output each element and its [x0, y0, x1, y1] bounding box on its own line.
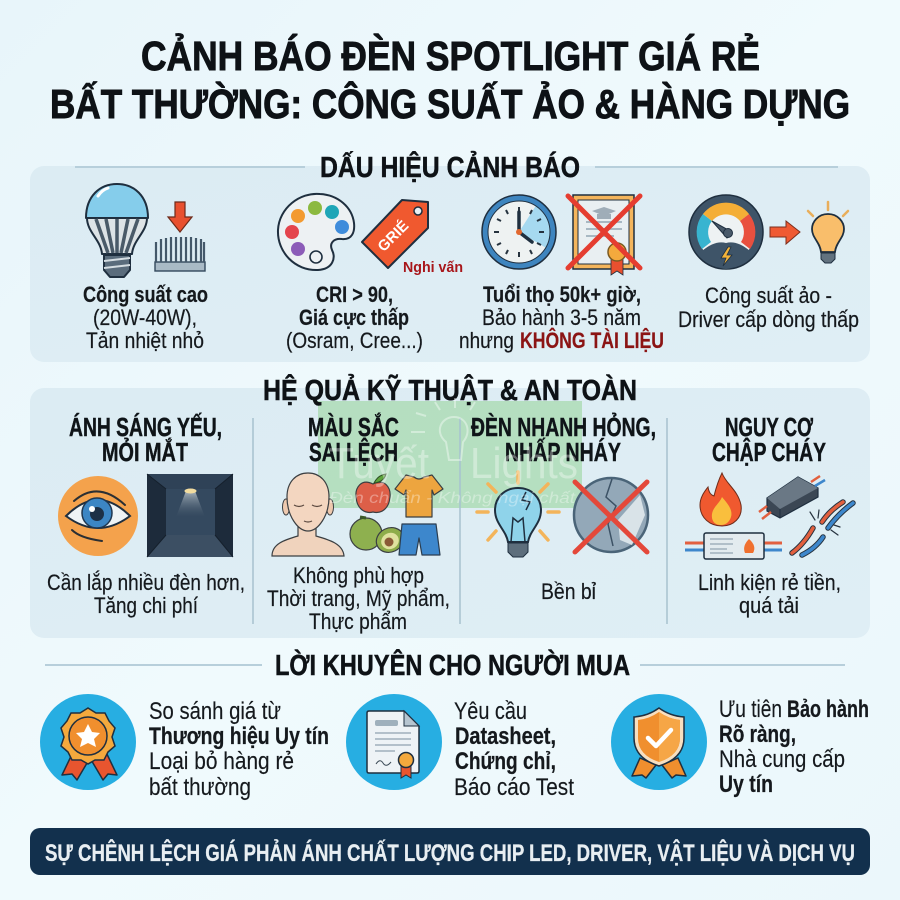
text: compare prices: So sánh giá từ [149, 698, 281, 725]
watermark: Tuyết [329, 439, 429, 488]
text: fire risk [698, 412, 841, 618]
text: colour deviation [267, 412, 450, 634]
text: fire risk: CHẬP CHÁY [712, 437, 826, 467]
text: fire risk: NGUY CƠ [725, 412, 814, 442]
text: CRI [286, 282, 423, 353]
icon: tired eye [58, 476, 138, 556]
icon: dark room [147, 474, 233, 557]
text: low light: ÁNH SÁNG YẾU, [69, 412, 222, 442]
text: fake wattage: Công suất ảo - [705, 283, 832, 308]
text: compare prices: Loại bỏ hàng rẻ [149, 748, 294, 775]
heading: warning signs: DẤU HIỆU CẢNH BÁO [320, 150, 580, 184]
text: prefer warranty: Uy tín [719, 771, 773, 798]
icon: award badge [40, 694, 136, 790]
text: compare prices [149, 698, 329, 801]
text: low light: Cần lắp nhiều đèn hơn, [47, 570, 245, 595]
text: fake wattage [678, 283, 859, 332]
text: fast failure: ĐÈN NHANH HỎNG, [471, 411, 656, 442]
icon: crossed-out broken globe [574, 478, 648, 552]
icon: small heat sink with arrow [155, 202, 205, 271]
text: prefer warranty: Ưu tiên [719, 696, 782, 723]
icon: fruit and clothes [350, 474, 443, 557]
watermark: Lights [470, 439, 578, 488]
text: colour deviation: MÀU SẮC [308, 412, 399, 442]
text: fake wattage: Driver cấp dòng thấp [678, 307, 859, 332]
icon: cracked bulb [477, 472, 559, 557]
text: low light: Tăng chi phí [94, 593, 198, 618]
icon: price tag: GRIÉ [374, 217, 412, 255]
text: fast failure [471, 411, 656, 604]
text: colour deviation: SAI LỆCH [309, 437, 398, 467]
text: lifetime and warranty [459, 282, 664, 353]
panel: warning signs [30, 150, 870, 362]
text: high power: Tản nhiệt nhỏ [86, 328, 204, 353]
text: request documents: Yêu cầu [454, 698, 527, 725]
icon: clock [482, 195, 556, 269]
icon: datasheet document [346, 694, 442, 790]
icon: overheating component [685, 533, 782, 559]
icon: gauge [689, 195, 763, 269]
text: request documents: Chứng chỉ, [455, 748, 556, 775]
text: prefer warranty: Rõ ràng, [719, 721, 796, 748]
text: low light: MỎI MẮT [102, 436, 188, 467]
icon: crossed-out certificate [568, 195, 640, 275]
arrow [770, 221, 800, 244]
icon: price tag [362, 200, 428, 268]
icon: warranty shield [611, 694, 707, 790]
heading: consequences: HỆ QUẢ KỸ THUẬT & AN TOÀN [263, 373, 637, 407]
title [50, 33, 850, 127]
text: lifetime and warranty: KHÔNG TÀI LIỆU [520, 328, 664, 353]
icon: broken wires [792, 502, 853, 555]
icon: driver box [759, 476, 825, 519]
text: lifetime and warranty: Bảo hành 3-5 năm [482, 305, 641, 330]
watermark [329, 398, 578, 507]
text: fire risk: Linh kiện rẻ tiền, [698, 570, 841, 595]
text: lifetime and warranty: Tuổi thọ 50k+ giờ, [483, 282, 641, 307]
text: high power [83, 282, 208, 353]
text: low light [47, 412, 245, 618]
text: compare prices: Thương hiệu Uy tín [149, 723, 329, 750]
text: compare prices: bất thường [149, 774, 251, 801]
text: lifetime and warranty: nhưng [459, 328, 514, 353]
label: questionable: Nghi vấn [403, 259, 463, 276]
bottom banner [30, 828, 870, 875]
text: prefer warranty: Bảo hành [787, 696, 869, 723]
icon: dim bulb [808, 202, 848, 263]
text: colour deviation: Thời trang, Mỹ phẩm, [267, 586, 450, 611]
text: fire risk: quá tải [739, 593, 799, 618]
icon: flame [700, 473, 741, 526]
text: colour deviation: Không phù hợp [293, 563, 424, 588]
icon: colour palette [278, 194, 354, 270]
title: CẢNH BÁO ĐÈN SPOTLIGHT GIÁ RẺ [141, 33, 760, 79]
text: fast failure: NHẤP NHÁY [505, 437, 621, 467]
text: request documents: Datasheet, [455, 723, 556, 750]
text: high power: (20W-40W), [93, 305, 197, 330]
text: CRI: CRI > 90, [316, 282, 393, 307]
text: CRI: (Osram, Cree...) [286, 328, 423, 353]
text: request documents [454, 698, 574, 801]
text: high power: Công suất cao [83, 282, 208, 307]
text: CRI: Giá cực thấp [299, 305, 409, 330]
text: request documents: Báo cáo Test [454, 774, 574, 801]
section: buyer advice [40, 648, 869, 801]
text: prefer warranty: Nhà cung cấp [719, 746, 845, 773]
text: prefer warranty [719, 696, 869, 798]
heading: buyer advice: LỜI KHUYÊN CHO NGƯỜI MUA [275, 648, 630, 682]
text: colour deviation: Thực phẩm [309, 609, 407, 634]
panel: consequences [30, 388, 870, 638]
watermark: Đèn chuẩn - Không ngại chất [329, 489, 576, 507]
text: fast failure: Bền bỉ [541, 579, 596, 604]
icon: face [272, 473, 344, 556]
icon: high power bulb [86, 184, 148, 277]
